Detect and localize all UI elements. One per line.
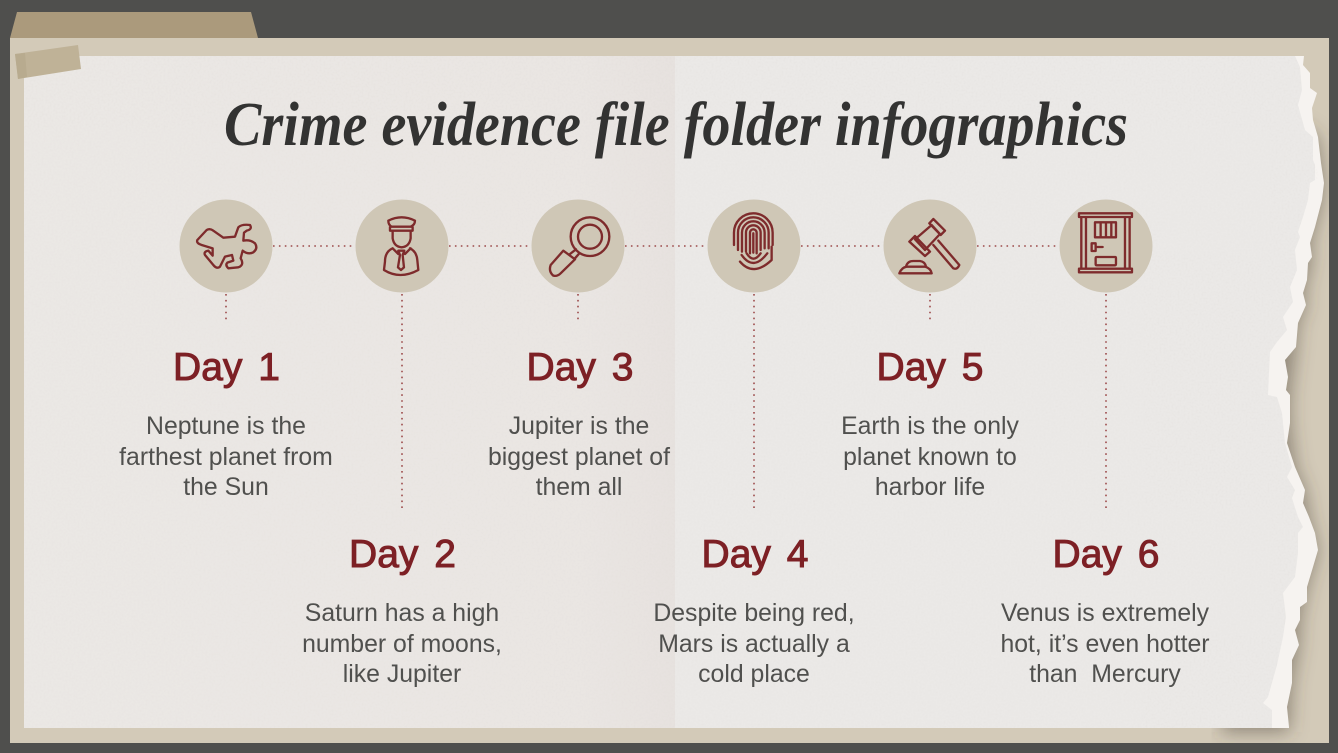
- icon: police officer: [356, 200, 448, 292]
- icon: prison door: [1060, 200, 1152, 292]
- text: day 6 description: than Mercury: [1029, 661, 1181, 688]
- icon: fingerprint: [708, 200, 800, 292]
- text: day 3 description: biggest planet of: [488, 444, 670, 471]
- step: day 3: [488, 200, 670, 501]
- step: day 4: [653, 200, 855, 688]
- text: day 4 description: cold place: [698, 661, 810, 688]
- heading: day 3: Day 3: [527, 346, 633, 389]
- text: day 2 description: Saturn has a high: [305, 600, 499, 627]
- text: day 4 description: Despite being red,: [653, 600, 855, 627]
- folder tab: [10, 12, 258, 38]
- text: day 1 description: farthest planet from: [119, 444, 333, 471]
- heading: day 4: Day 4: [702, 533, 808, 576]
- icon: gavel: [884, 200, 976, 292]
- paper shadow: [1222, 120, 1324, 732]
- text: day 2 description: like Jupiter: [343, 661, 461, 688]
- text: day 3 description: Jupiter is the: [509, 413, 649, 440]
- text: day 5 description: planet known to: [843, 444, 1017, 471]
- text: day 2 description: number of moons,: [302, 631, 502, 658]
- text: day 3 description: them all: [536, 474, 622, 501]
- text: day 6 description: Venus is extremely: [1001, 600, 1210, 627]
- heading: day 6: Day 6: [1053, 533, 1159, 576]
- timeline connectors: [226, 246, 1106, 508]
- step: day 5: [841, 200, 1019, 501]
- heading: day 2: Day 2: [349, 533, 456, 576]
- text: day 4 description: Mars is actually a: [658, 631, 850, 658]
- text: day 5 description: Earth is the only: [841, 413, 1019, 440]
- tape: [15, 45, 81, 79]
- text: day 6 description: hot, it’s even hotter: [1000, 631, 1210, 658]
- text: day 1 description: Neptune is the: [146, 413, 306, 440]
- text: day 1 description: the Sun: [183, 474, 269, 501]
- step: day 1: [119, 200, 333, 501]
- icon: magnifying glass: [532, 200, 624, 292]
- step: day 2: [302, 200, 502, 688]
- title: Crime evidence file folder infographics: [224, 91, 1128, 159]
- step: day 6: [1000, 200, 1210, 688]
- heading: day 5: Day 5: [877, 346, 983, 389]
- heading: day 1: Day 1: [173, 346, 280, 389]
- text: day 5 description: harbor life: [875, 474, 985, 501]
- icon: chalk outline body: [180, 200, 272, 292]
